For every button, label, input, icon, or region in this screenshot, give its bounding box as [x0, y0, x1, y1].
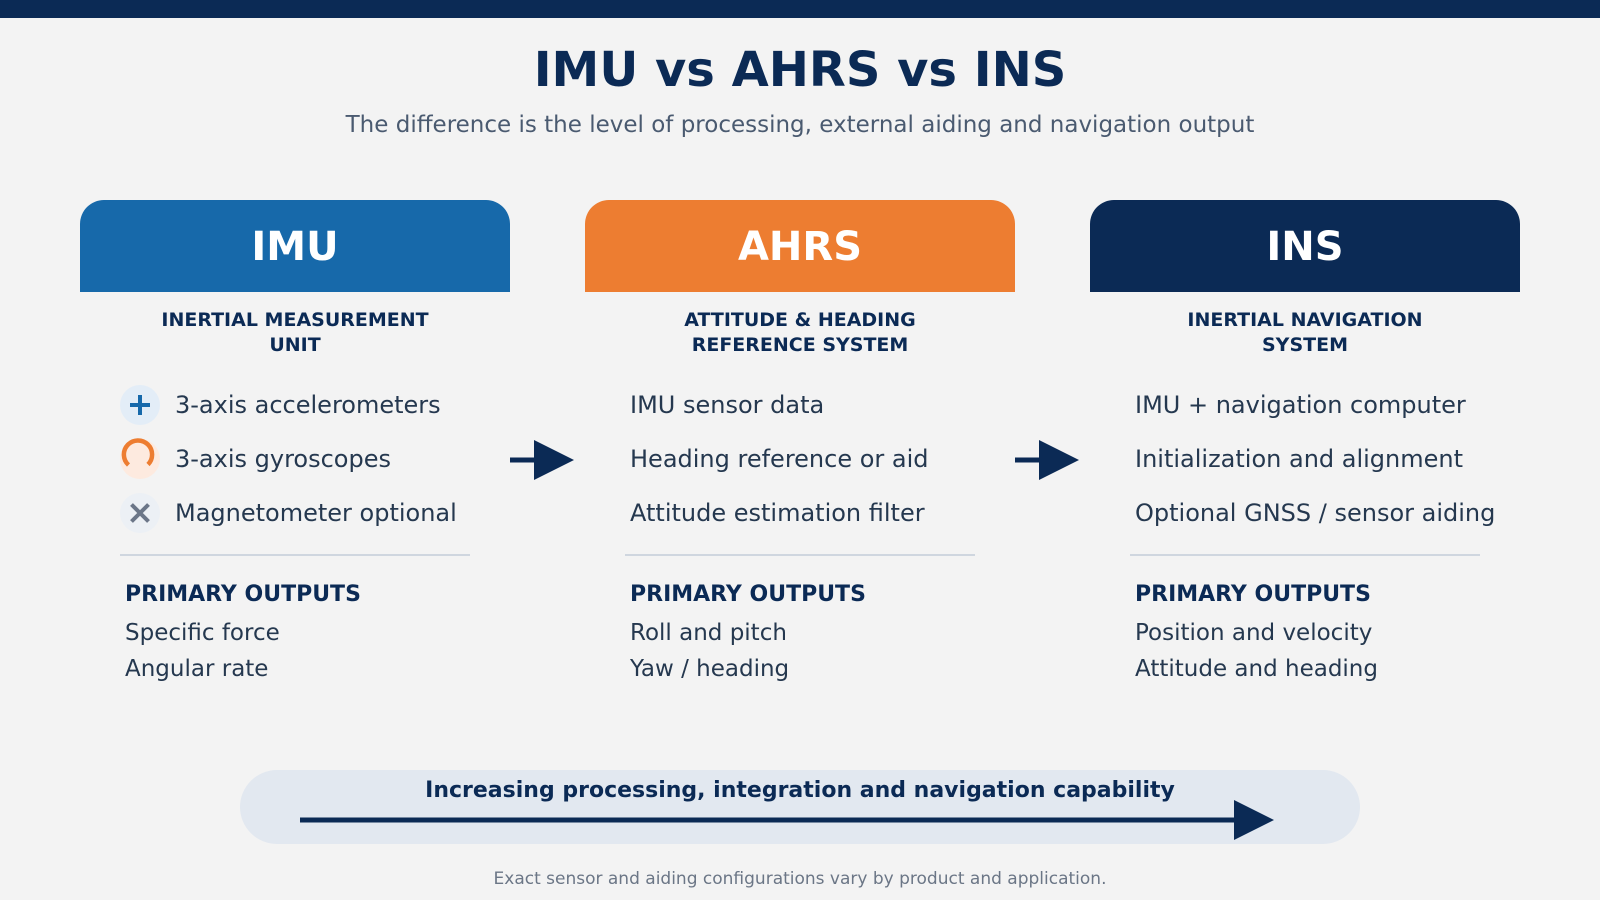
title: IMU vs AHRS vs INS — [534, 42, 1066, 98]
item: magnetometer: Magnetometer optional — [175, 499, 457, 527]
list: AHRS items: IMU sensor data — [630, 391, 824, 419]
outputs: AHRS: Yaw / heading — [629, 656, 789, 682]
header: AHRS — [585, 200, 1015, 292]
capability arrow — [300, 800, 1274, 840]
icon: accelerometer plus — [120, 385, 160, 425]
subtitle: AHRS: REFERENCE SYSTEM — [692, 334, 908, 356]
list: INS items: IMU + navigation computer — [1135, 391, 1466, 419]
list: AHRS items — [630, 391, 929, 527]
subtitle: INS: SYSTEM — [1262, 334, 1348, 356]
list: AHRS items: Attitude estimation filter — [630, 499, 925, 527]
top bar — [0, 0, 1600, 18]
icon: magnetometer cross — [120, 493, 160, 533]
outputs: AHRS: PRIMARY OUTPUTS — [630, 582, 866, 607]
outputs: IMU: Angular rate — [125, 656, 268, 682]
outputs: IMU — [125, 582, 361, 682]
subtitle: The difference is the level of processing, external aiding and navigation output — [345, 112, 1254, 138]
outputs: INS: Attitude and heading — [1135, 656, 1378, 682]
subtitle: AHRS: ATTITUDE & HEADING — [684, 309, 916, 331]
footnote: Exact sensor and aiding configurations vary by product and application. — [494, 869, 1106, 889]
capability label: Increasing processing, integration and navigation capability — [425, 778, 1175, 803]
panel: AHRS — [585, 200, 1015, 682]
header: IMU: IMU — [251, 224, 339, 270]
list: AHRS items: Heading reference or aid — [630, 445, 929, 473]
outputs: INS: PRIMARY OUTPUTS — [1135, 582, 1371, 607]
outputs: IMU: PRIMARY OUTPUTS — [125, 582, 361, 607]
list: INS items: Optional GNSS / sensor aiding — [1135, 499, 1495, 527]
list: INS items — [1135, 391, 1495, 527]
icon: gyroscope ring — [120, 439, 160, 479]
header: IMU — [80, 200, 510, 292]
item: gyroscopes: 3-axis gyroscopes — [175, 445, 391, 473]
outputs: AHRS — [629, 582, 866, 682]
arrow: IMU to AHRS — [510, 440, 574, 480]
outputs: IMU: Specific force — [125, 620, 280, 646]
outputs: INS: Position and velocity — [1135, 620, 1372, 646]
subtitle: INS: INERTIAL NAVIGATION — [1187, 309, 1423, 331]
header: AHRS: AHRS — [738, 224, 862, 270]
item: accelerometers: 3-axis accelerometers — [175, 391, 441, 419]
list: INS items: Initialization and alignment — [1135, 445, 1463, 473]
capability bar — [240, 770, 1360, 844]
header: INS: INS — [1266, 224, 1344, 270]
panel: INS — [1090, 200, 1520, 682]
outputs: INS — [1135, 582, 1378, 682]
header: INS — [1090, 200, 1520, 292]
arrow: AHRS to INS — [1015, 440, 1079, 480]
subtitle: IMU: INERTIAL MEASUREMENT — [161, 309, 429, 331]
outputs: AHRS: Roll and pitch — [630, 620, 787, 646]
panel: IMU — [80, 200, 510, 682]
subtitle: IMU: UNIT — [269, 334, 321, 356]
